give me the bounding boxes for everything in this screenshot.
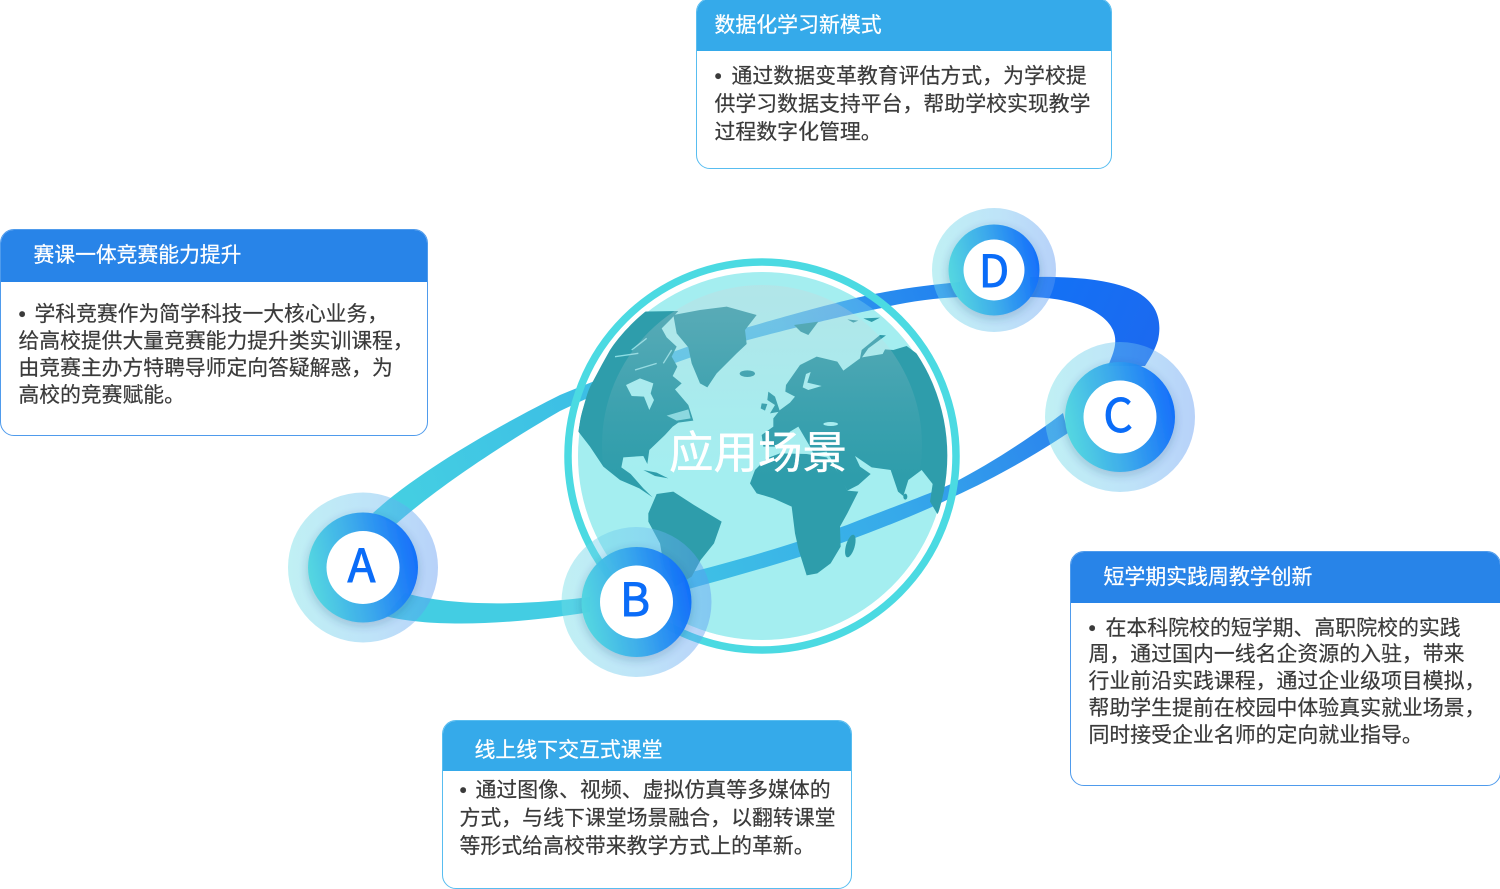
panel text: •: [18, 302, 26, 326]
North America: [578, 311, 693, 497]
panel text: 同时接受企业名师的定向就业指导。: [1088, 724, 1423, 746]
node C: [1045, 342, 1195, 492]
node A: [288, 492, 438, 642]
orbit band: A to B: [385, 593, 590, 624]
panel text: 通过图像、视频、虚拟仿真等多媒体的: [476, 778, 831, 802]
orbit band: A to D over the top: [373, 282, 960, 525]
panel text: •: [1088, 616, 1096, 640]
panel: 数据化学习新模式: [696, 0, 1112, 169]
Africa: [750, 453, 858, 575]
panel heading: [442, 721, 851, 770]
panel heading: 线上线下交互式课堂: [474, 738, 663, 762]
panel text: 过程数字化管理。: [714, 121, 882, 144]
world map: [578, 307, 949, 587]
globe inner highlight: [602, 285, 922, 605]
panel heading: 赛课一体竞赛能力提升: [34, 244, 241, 266]
panel heading: [1, 230, 426, 282]
panel text: 给高校提供大量竞赛能力提升类实训课程，: [18, 330, 414, 352]
panel text: [18, 302, 414, 406]
node A: A: [348, 530, 376, 596]
Sri Lanka: [903, 494, 907, 500]
panel text: 高校的竞赛赋能。: [18, 384, 185, 406]
panel text: 方式，与线下课堂场景融合，以翻转课堂: [460, 806, 836, 830]
orbit band: B to C: [680, 413, 1068, 590]
panel text: 帮助学生提前在校园中体验真实就业场景，: [1088, 696, 1485, 720]
panel heading: 数据化学习新模式: [714, 14, 882, 37]
node B: B: [620, 564, 650, 630]
globe and orbit diagram: [288, 208, 1195, 677]
Arctic channels: [615, 338, 672, 370]
node D: [932, 208, 1056, 332]
panel text: 通过数据变革教育评估方式，为学校提: [732, 65, 1087, 88]
panel text: [460, 778, 836, 858]
panel text: 学科竞赛作为简学科技一大核心业务，: [34, 302, 388, 326]
node C: C: [1103, 380, 1133, 446]
globe title: 应用场景: [669, 429, 847, 478]
South America: [648, 492, 722, 587]
Black Sea: [823, 422, 838, 426]
panel: 线上线下交互式课堂: [442, 720, 852, 888]
Svalbard: [794, 322, 818, 335]
panel text: [714, 64, 1091, 144]
panel text: 周，通过国内一线名企资源的入驻，带来: [1088, 642, 1465, 666]
Eurasia: [762, 335, 949, 514]
node B: [562, 527, 712, 677]
panel text: 供学习数据支持平台，帮助学校实现教学: [714, 93, 1091, 116]
Arctic islands: [847, 318, 880, 323]
panel text: 在本科院校的短学期、高职院校的实践: [1106, 616, 1461, 640]
panel text: [1088, 616, 1485, 746]
orbit band: D to C: [1030, 277, 1159, 366]
Greenland: [673, 307, 757, 387]
panel text: 由竞赛主办方特聘导师定向答疑解惑，为: [18, 356, 393, 380]
Hudson Bay: [626, 378, 654, 410]
Cuba: [643, 470, 668, 478]
panel: 短学期实践周教学创新: [1070, 551, 1500, 786]
panel heading: [1071, 552, 1500, 603]
node D: D: [979, 236, 1009, 300]
Iceland: [740, 370, 755, 377]
panel text: 行业前沿实践课程，通过企业级项目模拟，: [1088, 670, 1485, 692]
Madagascar: [845, 534, 856, 558]
panel heading: 短学期实践周教学创新: [1104, 566, 1312, 588]
British Isles: [761, 392, 780, 413]
globe disc: [578, 272, 946, 640]
Baltic Sea: [803, 372, 822, 390]
globe disc veil over the top band: [578, 272, 946, 640]
panel heading: [697, 0, 1111, 50]
panel text: •: [460, 778, 467, 802]
panel text: 等形式给高校带来教学方式上的革新。: [460, 834, 815, 858]
Gulf of St Lawrence: [667, 409, 691, 421]
globe outer ring: [568, 262, 956, 650]
panel: 赛课一体竞赛能力提升: [0, 229, 428, 436]
panel text: •: [714, 65, 722, 88]
